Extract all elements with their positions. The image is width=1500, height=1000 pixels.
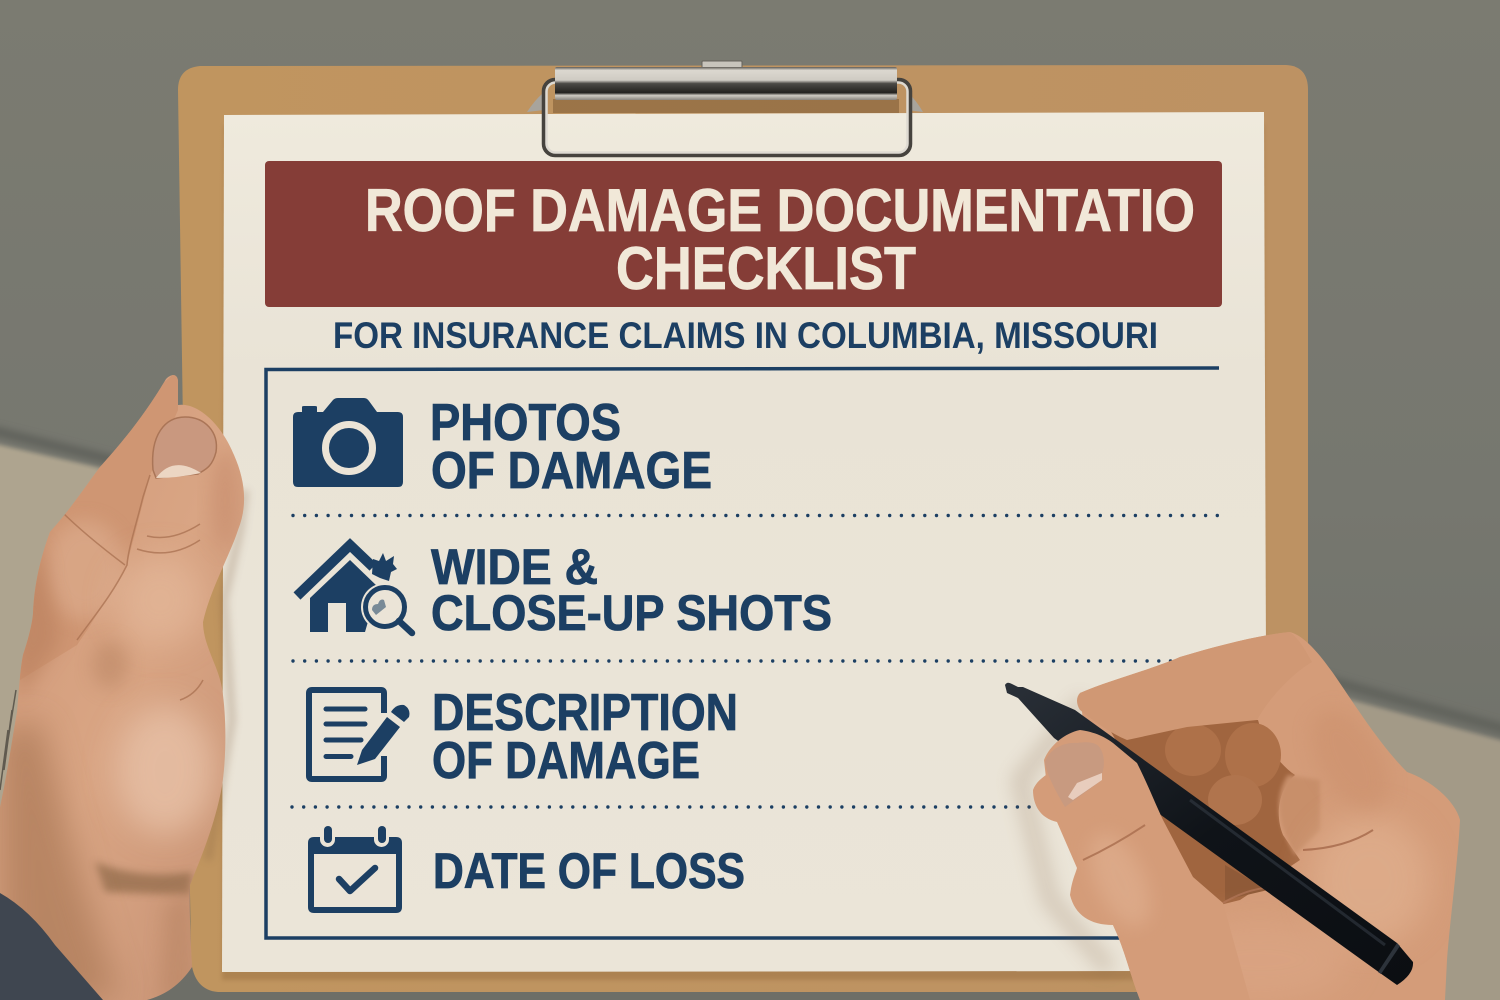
shadow under paper [222,125,1264,980]
title text [365,177,1195,302]
item 4: date of loss [308,823,745,913]
label: wide and close-up shots: CLOSE-UP SHOTS [431,585,832,641]
paper sheet [222,112,1266,972]
thumb over pen [1044,730,1250,1000]
left hand [0,360,260,1000]
arm hair [0,690,16,790]
metal clip [527,61,923,155]
subtitle: FOR INSURANCE CLAIMS IN COLUMBIA, MISSOURI [333,315,1158,356]
sweater cuff [0,893,103,1000]
label: description of damage: DESCRIPTION [432,684,738,742]
item 2: wide and close-up shots [297,539,832,641]
label: wide and close-up shots: WIDE & [431,539,598,595]
item 3: description of damage [309,684,738,790]
item 1: photos of damage [293,394,712,500]
clamp bar [555,67,897,100]
back of hand shading [115,705,215,835]
label: wide and close-up shots [431,539,832,641]
thumbnail [153,417,216,478]
title banner [265,161,1222,307]
right hand [1005,630,1470,1000]
icon: house with magnifier [297,545,412,633]
title text: CHECKLIST [616,235,916,302]
wire loop [544,80,910,155]
label: photos of damage: OF DAMAGE [431,442,712,500]
icon: document with pencil [309,690,409,779]
hand creases [60,475,203,700]
clipboard board [178,65,1308,992]
index finger over pen [1077,632,1312,740]
label: photos of damage: PHOTOS [430,394,621,452]
label: description of damage [432,684,738,790]
top tab [702,61,742,68]
pen [1005,683,1413,985]
icon: calendar with check [308,823,402,913]
clip shadow [553,99,899,113]
label: description of damage: OF DAMAGE [432,732,700,790]
shaded palm and curled fingers [1110,720,1320,905]
label: photos of damage [430,394,712,500]
hand shape [0,360,260,1000]
hand shadow on paper [208,490,245,860]
title text: ROOF DAMAGE DOCUMENTATIO [365,177,1195,244]
thumbnail [1045,742,1104,807]
hand shadow on paper [1020,700,1110,970]
label: date of loss: DATE OF LOSS [433,843,745,899]
fingers behind thumb [20,370,178,680]
hand shape [1030,630,1470,1000]
icon: camera [293,398,403,487]
checklist frame [266,368,1219,938]
clip side wings [527,94,923,112]
